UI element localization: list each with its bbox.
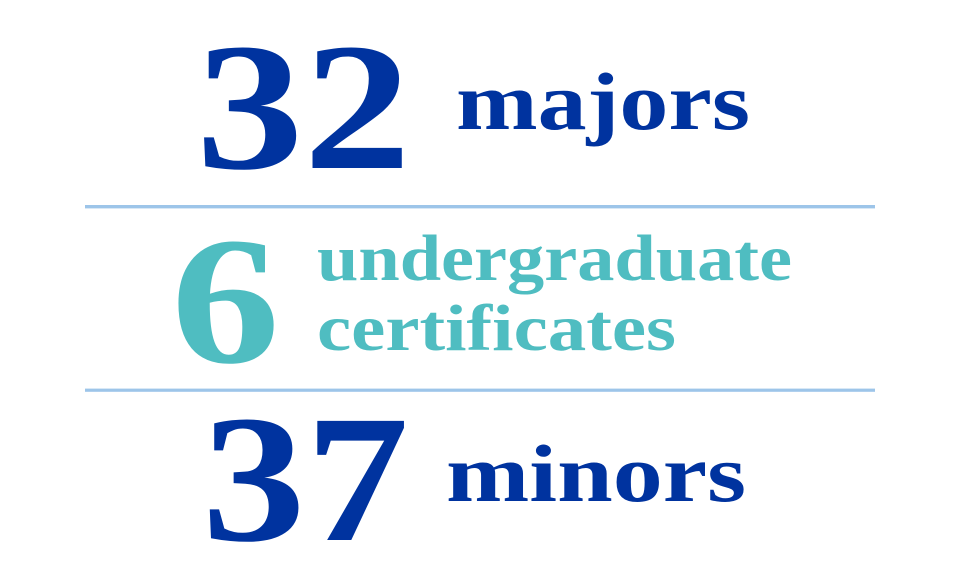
label: majors: majors bbox=[456, 56, 750, 147]
label: undergraduate certificates bbox=[317, 222, 792, 365]
divider bottom bbox=[85, 389, 875, 392]
number: 32: 32 bbox=[196, 7, 411, 208]
label: undergraduate certificates: certificates bbox=[317, 292, 676, 365]
stat: 37 minors bbox=[202, 379, 746, 580]
number: 37: 37 bbox=[202, 379, 409, 580]
divider top bbox=[85, 205, 875, 208]
label: undergraduate certificates: undergraduate bbox=[317, 222, 792, 295]
label: minors: minors bbox=[446, 428, 746, 519]
number: 6: 6 bbox=[171, 201, 280, 402]
stat: 32 majors bbox=[196, 7, 750, 208]
stat: 6 undergraduate certificates bbox=[171, 201, 792, 402]
